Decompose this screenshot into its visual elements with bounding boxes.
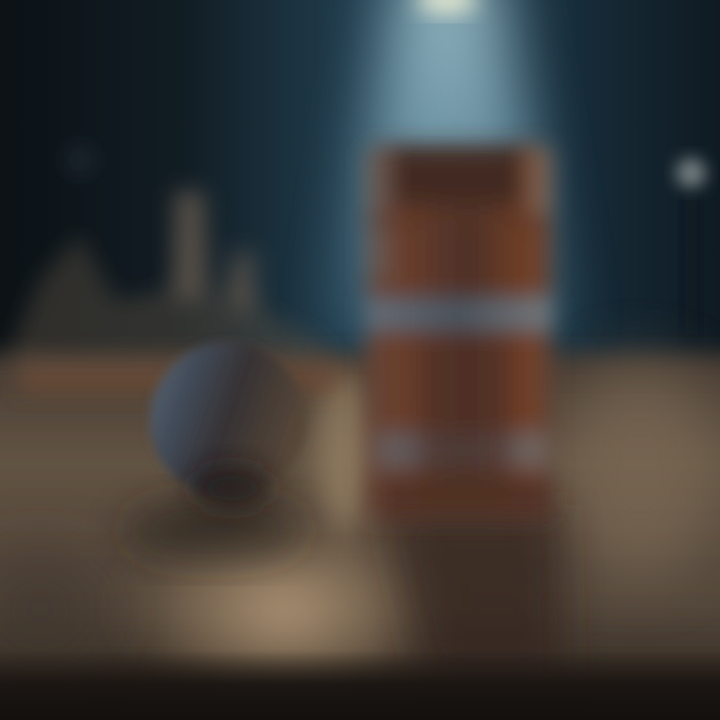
background wall	[0, 0, 720, 370]
dark table front edge	[0, 650, 720, 720]
cylinder shadow on table	[385, 505, 565, 680]
sphere shadow	[125, 502, 305, 558]
table surface	[0, 354, 720, 715]
background skyline shapes	[10, 146, 345, 392]
spotlight glow	[335, 0, 565, 340]
stacked cylinder	[366, 145, 552, 520]
background lamp right	[676, 158, 706, 335]
sphere	[150, 342, 306, 510]
